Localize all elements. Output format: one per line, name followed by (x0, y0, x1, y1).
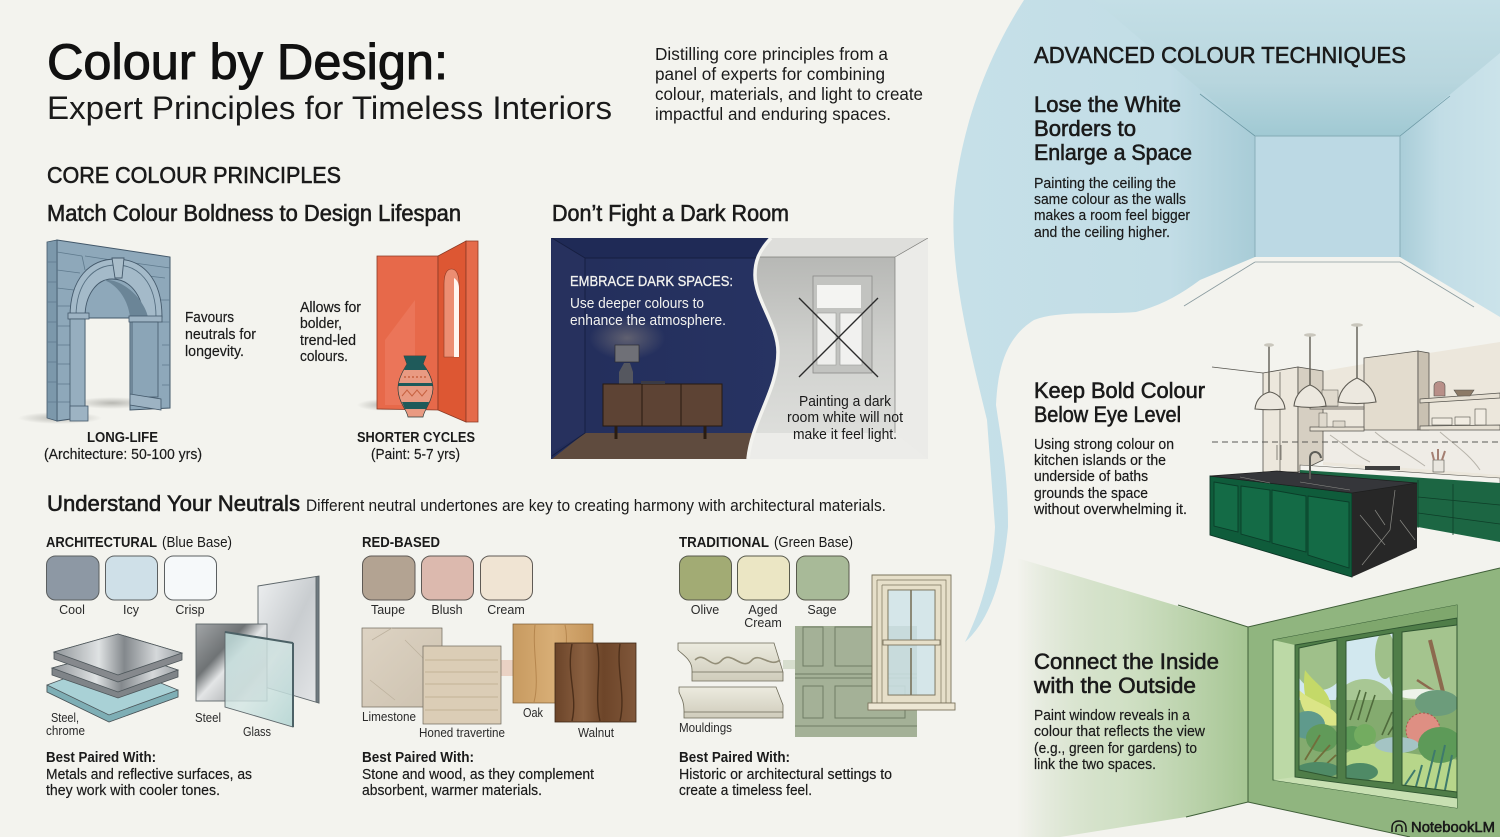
caption: long-life (44, 430, 202, 463)
caption: shorter cycles: SHORTER CYCLES (357, 430, 475, 446)
pendant lights (1255, 323, 1376, 410)
material labels: Steel (195, 711, 221, 725)
text: embrace dark spaces: EMBRACE DARK SPACES: (570, 274, 733, 290)
text: embrace dark spaces: Use deeper colours to (570, 296, 704, 312)
panel: dark room comparison (551, 238, 928, 459)
text: best paired historic: Best Paired With: (679, 750, 790, 766)
text: keep bold colour below eye level: Below Eye Level (1034, 402, 1181, 427)
text: best paired historic: create a timeless feel. (679, 783, 812, 799)
back wall (1323, 342, 1500, 480)
text: best paired stone: Best Paired With: (362, 750, 474, 766)
label: allows for bolder: colours. (300, 349, 348, 365)
text: keep bold colour below eye level: Using strong colour on (1034, 437, 1174, 453)
label: allows for bolder: bolder, (300, 316, 342, 332)
text: lose the white borders: makes a room feel bigger (1034, 208, 1190, 224)
swatch labels: Cream (744, 616, 782, 630)
swatch labels: Olive (691, 603, 719, 617)
swatches: blue base (46, 556, 216, 600)
intro text: colour, materials, and light to create (655, 84, 923, 104)
text: embrace dark spaces: enhance the atmosphere. (570, 313, 726, 329)
text: lose the white borders: Lose the White (1034, 92, 1181, 117)
text: lose the white borders (1034, 92, 1192, 241)
text: lose the white borders: Painting the ceiling the (1034, 176, 1176, 192)
heading: dark room: Don’t Fight a Dark Room (552, 200, 789, 226)
icon: window with garden view (1273, 605, 1472, 808)
caption: long-life: LONG-LIFE (87, 430, 158, 446)
intro text: Distilling core principles from a (655, 44, 888, 64)
text: connect inside with outside: link the two spaces. (1034, 757, 1156, 773)
material labels: chrome (46, 724, 85, 738)
material labels: Honed travertine (419, 726, 505, 740)
illustration: kitchen (1210, 323, 1500, 577)
text: best paired historic (679, 750, 892, 799)
text: connect inside with outside: colour that reflects the view (1034, 724, 1206, 740)
shelves and crockery (1310, 382, 1500, 431)
illustration: stone arch (18, 240, 170, 424)
swatch labels: Aged (748, 603, 778, 617)
text: best paired historic: Historic or architectural settings to (679, 767, 892, 783)
material labels (362, 706, 614, 740)
swatches: green base (680, 556, 849, 600)
icon: lamp and sideboard (589, 316, 722, 439)
text: connect inside with outside: Connect the Inside (1034, 649, 1219, 674)
material labels (46, 711, 271, 739)
label: favours neutrals: neutrals for (185, 327, 256, 343)
panel: architectural neutrals (46, 535, 319, 799)
text: best paired metals: Best Paired With: (46, 750, 156, 766)
text: painting white: room white will not (787, 409, 904, 426)
marble splashback (1323, 430, 1500, 475)
heading: traditional: TRADITIONAL (679, 535, 769, 551)
text: best paired stone: absorbent, warmer materials. (362, 783, 542, 799)
swatch labels: Sage (807, 603, 837, 617)
illustration: sage panelling (795, 626, 917, 737)
illustration: mouldings (678, 643, 797, 718)
illustration: sash window (868, 575, 955, 710)
text: connect inside with outside (1033, 649, 1219, 773)
intro text: impactful and enduring spaces. (655, 104, 891, 124)
icon: crossed-out window (799, 276, 878, 377)
panel: blue room backdrop (950, 0, 1500, 660)
text: best paired stone: Stone and wood, as they complement (362, 767, 594, 783)
label: favours neutrals: longevity. (185, 344, 244, 360)
island (1210, 452, 1417, 577)
heading: advanced colour techniques: ADVANCED COLOUR TECHNIQUES (1034, 42, 1406, 68)
heading: core colour principles: CORE COLOUR PRINCIPLES (47, 162, 341, 188)
eye-level dashed line (1212, 441, 1500, 443)
white skirting lines (1184, 262, 1474, 307)
label: favours neutrals (185, 310, 256, 360)
heading: understand your neutrals: Understand Your Neutrals (47, 491, 300, 516)
heading: architectural: (Blue Base) (162, 535, 232, 551)
label: favours neutrals: Favours (185, 310, 234, 326)
text: painting white: make it feel light. (793, 426, 897, 443)
text: keep bold colour below eye level: underside of baths (1034, 469, 1148, 485)
swatch labels (691, 603, 837, 630)
intro text: panel of experts for combining (655, 64, 885, 84)
logo: NotebookLM: NotebookLM (1411, 819, 1495, 836)
illustration: steel and glass panels (196, 576, 319, 727)
title (47, 34, 612, 126)
heading: understand your neutrals: Different neutral undertones are key to creating harmony with architectural materials. (306, 497, 886, 515)
label: allows for bolder (300, 300, 361, 365)
material labels: Walnut (578, 726, 614, 740)
text: lose the white borders: Enlarge a Space (1034, 140, 1192, 165)
text: painting white: Painting a dark (799, 393, 891, 410)
text: keep bold colour below eye level: kitchen islands or the (1034, 453, 1166, 469)
back counter cabinets (1300, 449, 1500, 542)
text: lose the white borders: Borders to (1034, 116, 1136, 141)
panel: red-based neutrals (362, 535, 636, 799)
right side white room (756, 238, 928, 433)
text: best paired stone (362, 750, 594, 799)
caption: shorter cycles (357, 430, 475, 463)
heading: traditional: (Green Base) (774, 535, 853, 551)
panel: traditional neutrals (678, 535, 955, 799)
text: lose the white borders: and the ceiling higher. (1034, 225, 1170, 241)
illustration: stone and wood samples (362, 624, 636, 724)
swatch labels: Cool (59, 603, 85, 617)
heading: architectural: ARCHITECTURAL (46, 535, 157, 551)
material labels: Glass (243, 725, 271, 739)
material label: Mouldings (679, 721, 732, 735)
material labels: Oak (523, 706, 544, 720)
title: Colour by Design: (47, 34, 448, 90)
heading: red-based: RED-BASED (362, 535, 440, 551)
text: lose the white borders: same colour as the walls (1034, 192, 1186, 208)
heading: understand your neutrals (47, 491, 886, 516)
text: connect inside with outside: with the Outside (1033, 673, 1196, 698)
material labels: Limestone (362, 710, 416, 724)
panel: green room backdrop (1017, 558, 1500, 837)
text: keep bold colour below eye level: grounds the space (1034, 486, 1148, 502)
left side navy room (551, 238, 778, 459)
tall cabinets (1263, 367, 1298, 472)
swatch labels: Crisp (175, 603, 205, 617)
intro text (655, 44, 923, 124)
illustration: red painted wall with vase (357, 241, 478, 422)
swatch labels: Cream (487, 603, 525, 617)
text: painting white (787, 393, 904, 443)
text: keep bold colour below eye level: Keep Bold Colour (1034, 378, 1205, 403)
label: allows for bolder: trend-led (300, 333, 356, 349)
caption: long-life: (Architecture: 50-100 yrs) (44, 447, 202, 463)
swatch labels: Taupe (371, 603, 405, 617)
swatch labels (59, 603, 205, 617)
caption: shorter cycles: (Paint: 5-7 yrs) (371, 447, 460, 463)
swatch labels: Blush (431, 603, 463, 617)
icon: vase (398, 356, 433, 417)
text: best paired metals: Metals and reflective surfaces, as (46, 767, 252, 783)
swatch labels: Icy (123, 603, 140, 617)
heading: match colour boldness: Match Colour Boldness to Design Lifespan (47, 200, 461, 226)
swatch labels (371, 603, 525, 617)
text: embrace dark spaces (570, 274, 733, 329)
text: connect inside with outside: Paint window reveals in a (1034, 708, 1191, 724)
white wavy divider (748, 238, 778, 459)
text: connect inside with outside: (e.g., green for gardens) to (1034, 741, 1197, 757)
text: keep bold colour below eye level (1033, 378, 1205, 518)
title: Expert Principles for Timeless Interiors (47, 90, 612, 126)
text: best paired metals: they work with cooler tones. (46, 783, 220, 799)
material labels: Steel, (51, 711, 79, 725)
swatches: red base (362, 556, 532, 600)
label: allows for bolder: Allows for (300, 300, 361, 316)
illustration: stacked metal plates (47, 634, 182, 722)
text: keep bold colour below eye level: without overwhelming it. (1033, 502, 1187, 518)
text: best paired metals (46, 750, 252, 799)
